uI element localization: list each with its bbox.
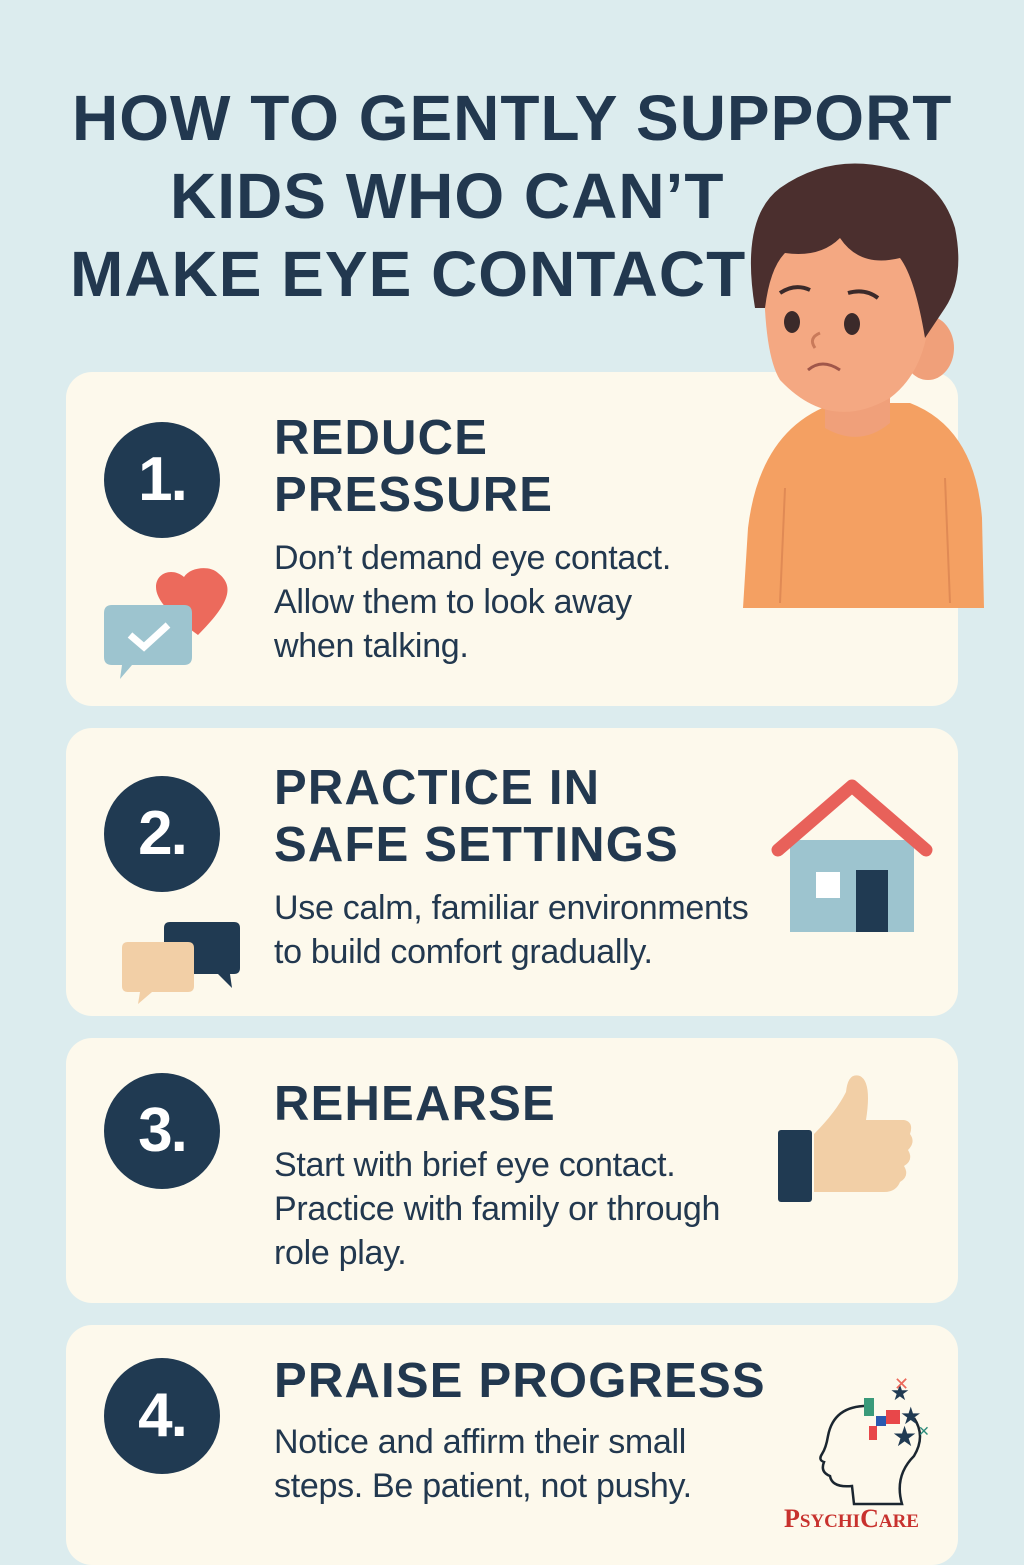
text 1: [274, 539, 671, 665]
heading 4: PRAISE PROGRESS: [274, 1354, 766, 1408]
title: HOW TO GENTLY SUPPORT: [72, 82, 952, 154]
number 4: 4.: [138, 1381, 186, 1450]
icon: thumbs up: [778, 1075, 912, 1202]
number 4: [104, 1358, 220, 1474]
number 1: 1.: [138, 445, 186, 514]
number 2: 2.: [138, 799, 186, 868]
panel: praise progress: [66, 1325, 958, 1565]
illustration: sad boy: [743, 164, 984, 608]
text 4: steps. Be patient, not pushy.: [274, 1467, 692, 1505]
logo: PsychiCare: [784, 1376, 930, 1533]
logo: PsychiCare: PSYCHICARE: [784, 1504, 919, 1533]
number 2: [104, 776, 220, 892]
panel: safe settings: [66, 728, 958, 1016]
icon: chat bubbles: [122, 922, 240, 1004]
heading 1: PRESSURE: [274, 468, 553, 522]
title: KIDS WHO CAN’T: [170, 160, 724, 232]
panel: reduce pressure: [66, 372, 958, 706]
logo: PsychiCare: ★: [900, 1402, 922, 1430]
icon: house: [772, 780, 932, 932]
icon: chat with heart: [104, 568, 228, 679]
title: [70, 82, 952, 310]
text 3: role play.: [274, 1234, 406, 1272]
logo: PsychiCare: ✕: [918, 1424, 930, 1440]
number 3: [104, 1073, 220, 1189]
logo: PsychiCare: ★: [892, 1420, 917, 1453]
title: MAKE EYE CONTACT: [70, 238, 746, 310]
panel: rehearse: [66, 1038, 958, 1303]
text 3: Practice with family or through: [274, 1190, 720, 1228]
number 1: [104, 422, 220, 538]
heading 1: [274, 411, 553, 522]
heading 3: REHEARSE: [274, 1077, 556, 1131]
heading 1: REDUCE: [274, 411, 488, 465]
text 3: [274, 1146, 720, 1272]
logo: PsychiCare: ★: [890, 1381, 910, 1406]
text 4: Notice and affirm their small: [274, 1423, 686, 1461]
text 1: when talking.: [274, 627, 469, 665]
text 4: [274, 1423, 692, 1505]
number 3: 3.: [138, 1096, 186, 1165]
text 2: to build comfort gradually.: [274, 933, 653, 971]
text 3: Start with brief eye contact.: [274, 1146, 675, 1184]
heading 2: SAFE SETTINGS: [274, 818, 679, 872]
text 1: Don’t demand eye contact.: [274, 539, 671, 577]
heading 2: [274, 761, 679, 872]
text 2: Use calm, familiar environments: [274, 889, 748, 927]
heading 2: PRACTICE IN: [274, 761, 600, 815]
text 2: [274, 889, 748, 971]
text 1: Allow them to look away: [274, 583, 632, 621]
